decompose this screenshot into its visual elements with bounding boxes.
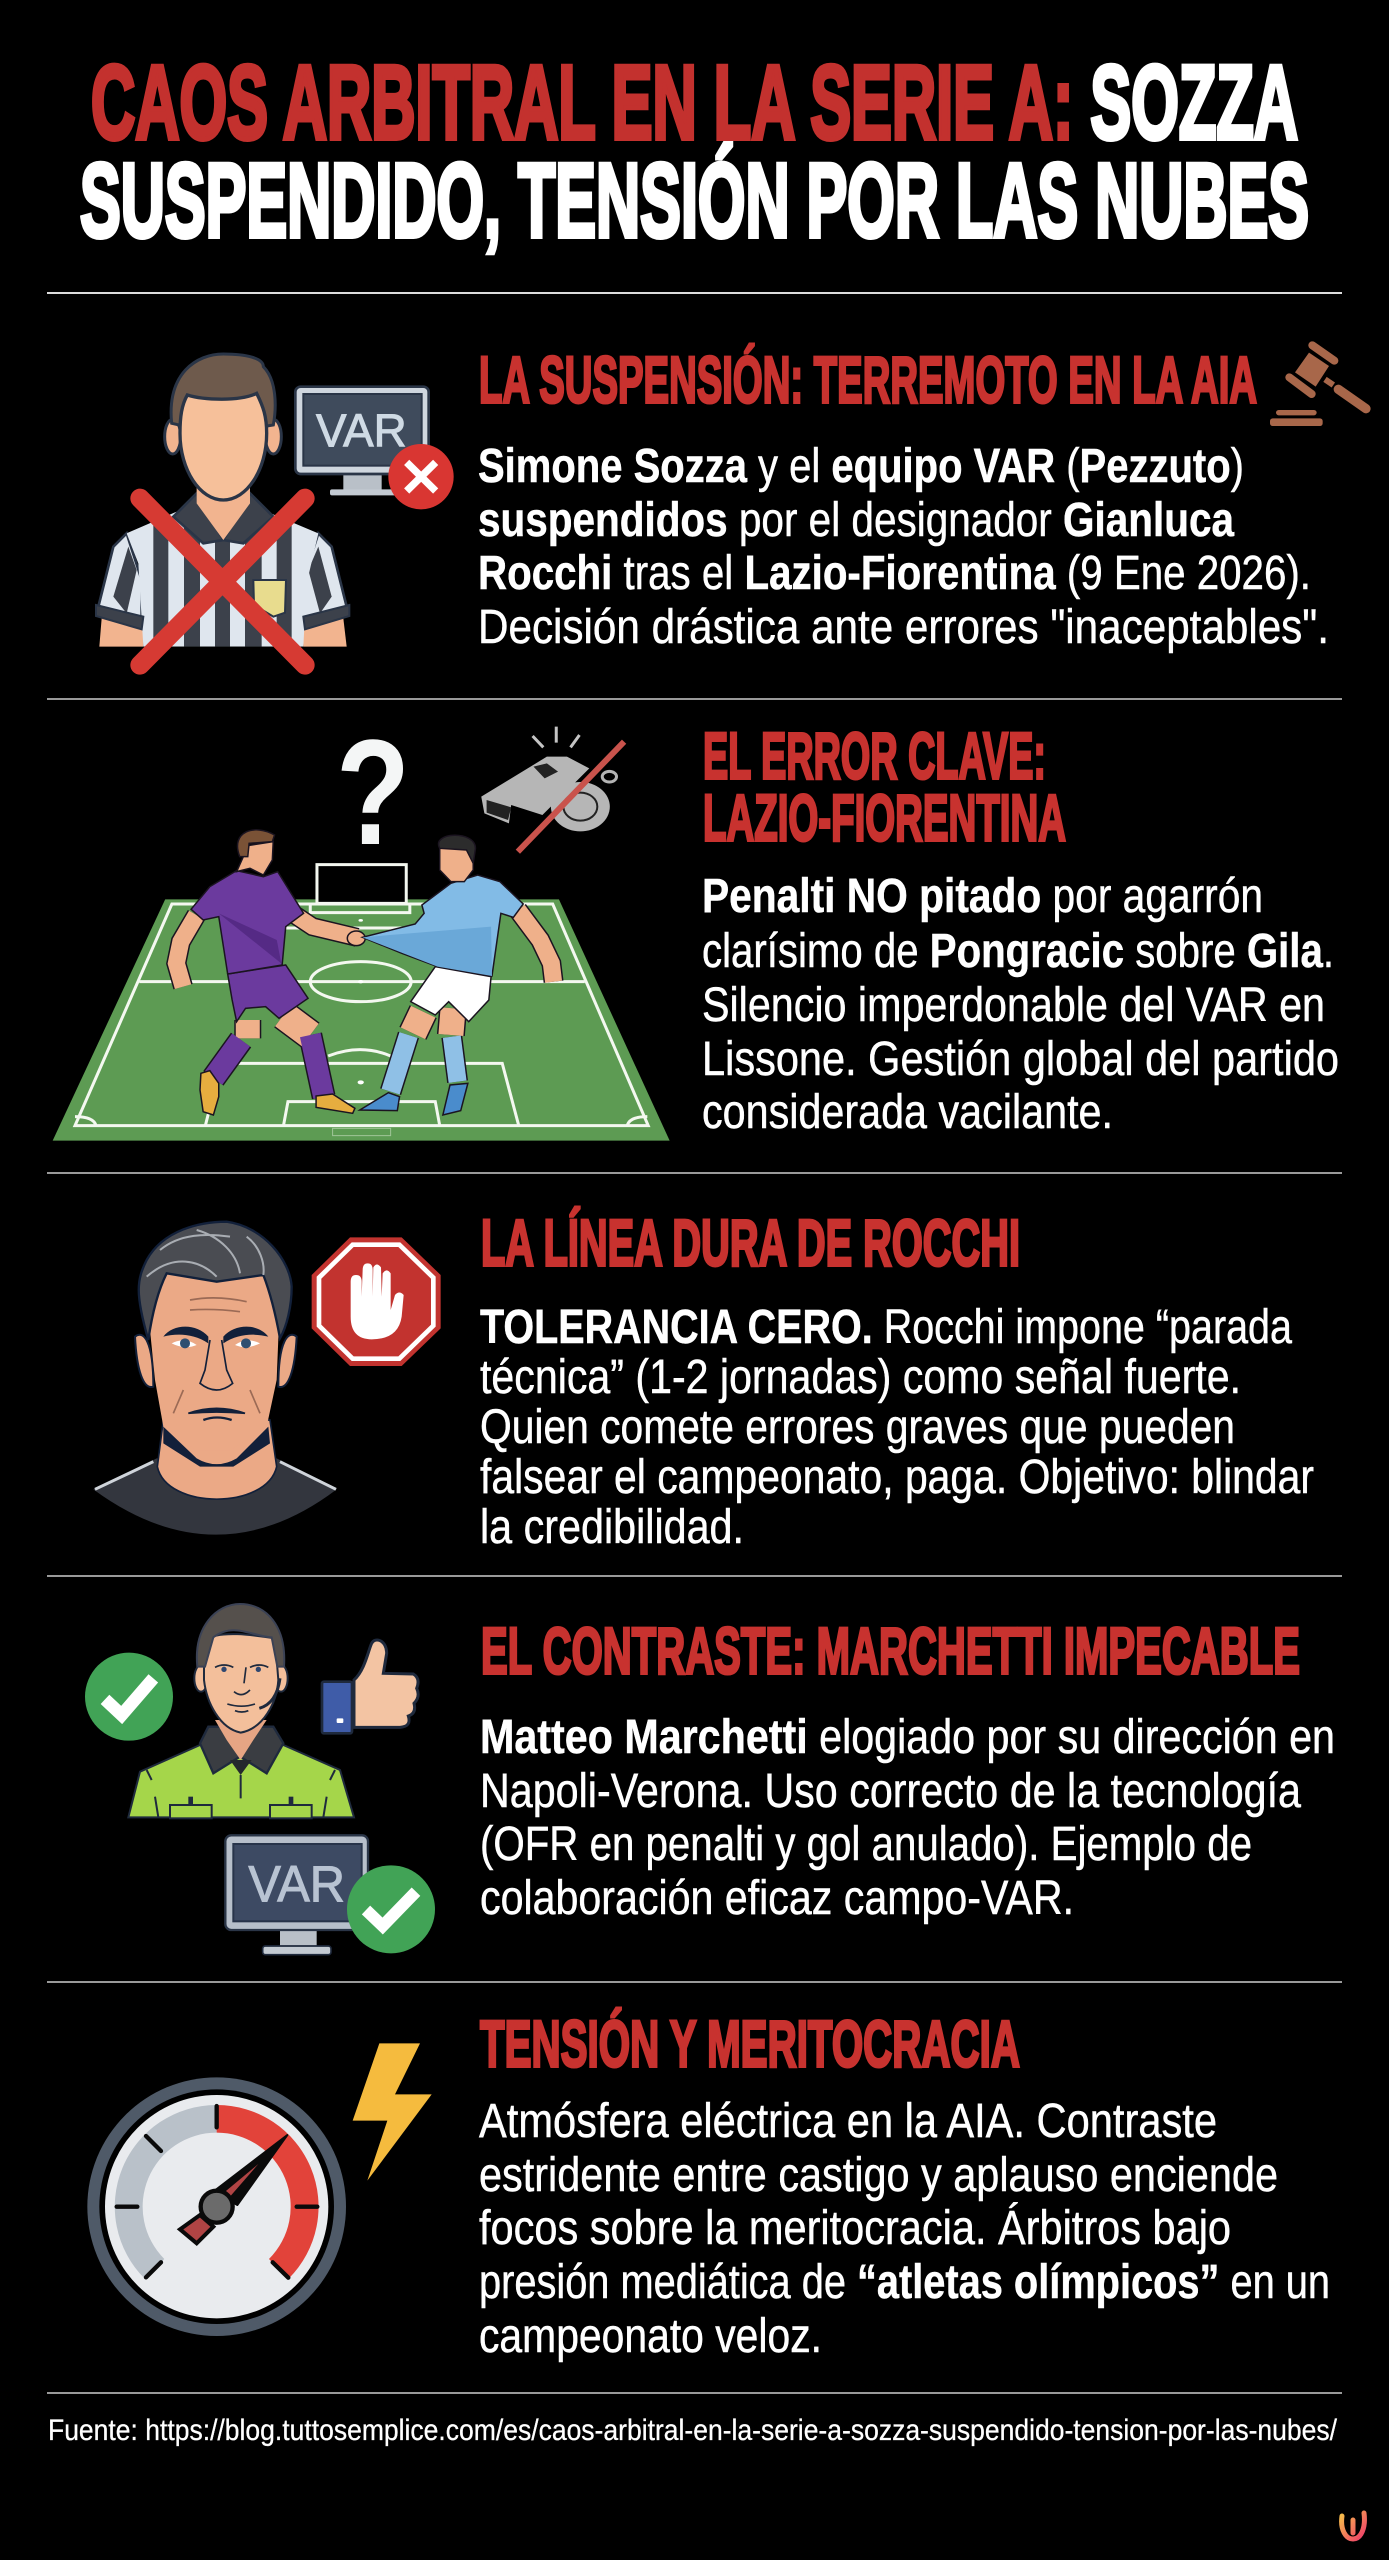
referee figure bbox=[96, 354, 349, 650]
logo mark bbox=[1342, 2513, 1364, 2539]
title bbox=[80, 44, 1309, 260]
panel: tensión y meritocracia bbox=[87, 2006, 1330, 2363]
text block: Simone Sozza y el equipo VAR (Pezzuto) bbox=[478, 440, 1244, 493]
illustration: Rocchi portrait bbox=[93, 1222, 337, 1535]
panel: la línea dura bbox=[93, 1206, 1314, 1554]
illustration: pitch and shirt pull bbox=[53, 727, 670, 1141]
text block bbox=[480, 1711, 1335, 1925]
panel: el contraste bbox=[85, 1604, 1335, 1955]
icon: red cross badge bbox=[388, 444, 454, 509]
icon: VAR monitor bbox=[225, 1835, 368, 1955]
text block: la credibilidad. bbox=[480, 1501, 744, 1554]
icon: VAR monitor: VAR bbox=[316, 405, 407, 457]
icon: pressure gauge bbox=[87, 2077, 346, 2336]
heading bbox=[703, 718, 1066, 854]
player: light blue bbox=[360, 835, 554, 1115]
text block bbox=[702, 870, 1339, 1139]
text block: técnica” (1-2 jornadas) como señal fuerte. bbox=[480, 1351, 1241, 1404]
icon: thumbs up bbox=[322, 1640, 418, 1733]
icon: lightning bolt bbox=[353, 2043, 432, 2181]
panel: el error clave bbox=[53, 708, 1339, 1141]
text block: estridente entre castigo y aplauso enciende bbox=[479, 2149, 1278, 2202]
text block: suspendidos por el designador Gianluca bbox=[478, 494, 1234, 547]
text block: Quien comete errores graves que pueden bbox=[480, 1401, 1235, 1454]
text block: (OFR en penalti y gol anulado). Ejemplo de bbox=[480, 1818, 1252, 1871]
illustration: Marchetti and VAR bbox=[85, 1604, 435, 1955]
text block: clarísimo de Pongracic sobre Gila. bbox=[702, 925, 1334, 978]
heading: TENSIÓN Y MERITOCRACIA bbox=[480, 2006, 1020, 2080]
player: purple bbox=[176, 830, 365, 1115]
text block: TOLERANCIA CERO. Rocchi impone “parada bbox=[480, 1301, 1292, 1354]
icon: red X bbox=[140, 498, 305, 665]
text block: colaboración eficaz campo-VAR. bbox=[480, 1872, 1074, 1925]
text block: campeonato veloz. bbox=[479, 2310, 822, 2363]
text block bbox=[480, 1301, 1314, 1554]
icon: question mark: ? bbox=[336, 708, 410, 876]
icon: green check bbox=[347, 1865, 435, 1953]
illustration: suspended referee bbox=[96, 354, 454, 665]
panel: la suspensión bbox=[96, 342, 1366, 665]
text block: focos sobre la meritocracia. Árbitros bajo bbox=[479, 2202, 1231, 2255]
text block: considerada vacilante. bbox=[702, 1086, 1113, 1139]
text block bbox=[478, 440, 1329, 654]
text block: Atmósfera eléctrica en la AIA. Contraste bbox=[479, 2095, 1217, 2148]
football pitch bbox=[53, 865, 670, 1141]
icon: VAR monitor: VAR bbox=[248, 1856, 345, 1913]
text block bbox=[479, 2095, 1330, 2363]
heading: EL ERROR CLAVE: bbox=[703, 718, 1046, 792]
icon: stop hand sign bbox=[312, 1237, 441, 1366]
text block: presión mediática de “atletas olímpicos” en un bbox=[479, 2256, 1330, 2309]
heading: LA LÍNEA DURA DE ROCCHI bbox=[481, 1206, 1020, 1280]
icon: VAR monitor bbox=[295, 387, 429, 495]
text block: Rocchi tras el Lazio-Fiorentina (9 Ene 2026). bbox=[478, 547, 1311, 600]
text block: Penalti NO pitado por agarrón bbox=[702, 870, 1263, 923]
icon: gavel bbox=[1270, 345, 1366, 426]
icon: green check bbox=[85, 1653, 173, 1741]
heading: LAZIO-FIORENTINA bbox=[703, 780, 1066, 854]
icon: crossed whistle bbox=[481, 727, 624, 852]
referee Marchetti bbox=[128, 1604, 354, 1818]
